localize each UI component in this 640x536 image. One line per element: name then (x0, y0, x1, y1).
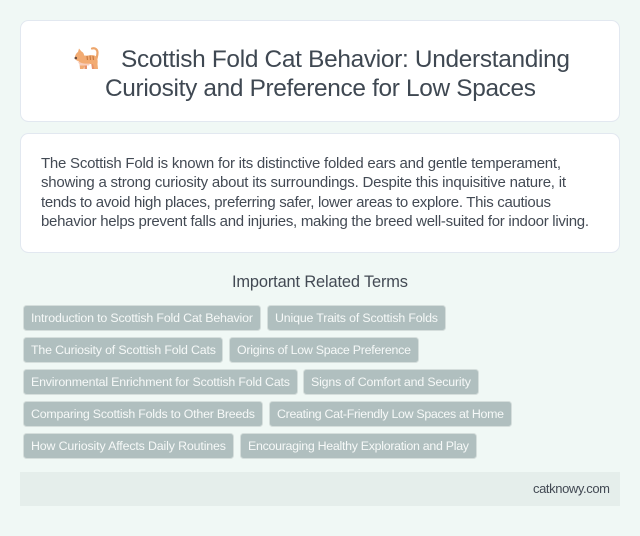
footer (20, 472, 620, 506)
footer source text: catknowy.com (533, 481, 610, 496)
tag (304, 370, 478, 394)
tag: How Curiosity Affects Daily Routines (31, 439, 226, 453)
tag list (24, 306, 512, 458)
title line 1: Scottish Fold Cat Behavior: Understanding (121, 46, 570, 73)
stripes (87, 56, 94, 60)
tag (268, 306, 446, 330)
description line 4: behavior helps prevent falls and injuries, making the breed well-suited for indoor living. (41, 213, 589, 230)
tag: Introduction to Scottish Fold Cat Behavior (31, 311, 253, 325)
panel: description card (20, 134, 620, 252)
head (75, 48, 84, 61)
panel: title card (20, 20, 620, 122)
tag (230, 338, 418, 362)
tag (24, 370, 298, 394)
tag: Comparing Scottish Folds to Other Breeds (31, 407, 255, 421)
tag: The Curiosity of Scottish Fold Cats (31, 343, 216, 357)
tag: Encouraging Healthy Exploration and Play (248, 439, 470, 453)
tag (24, 434, 234, 458)
tag (270, 402, 512, 426)
icon: cat (74, 48, 98, 69)
tag (24, 306, 260, 330)
tag: Environmental Enrichment for Scottish Fold Cats (31, 375, 290, 389)
description line 3: tends to avoid high places, preferring safer, lower areas to explore. This cautious (41, 194, 551, 211)
far legs (84, 62, 94, 69)
description line 1: The Scottish Fold is known for its distinctive folded ears and gentle temperament, (41, 155, 561, 172)
tag: Signs of Comfort and Security (311, 375, 472, 389)
tag (24, 338, 222, 362)
tag (240, 434, 476, 458)
belly (77, 60, 90, 66)
title line 2: Curiosity and Preference for Low Spaces (105, 75, 536, 102)
tag: Unique Traits of Scottish Folds (275, 311, 438, 325)
tag: Origins of Low Space Preference (237, 343, 411, 357)
description line 2: showing a strong curiosity about its surroundings. Despite this inquisitive nature, it (41, 174, 567, 191)
tag: Creating Cat-Friendly Low Spaces at Home (277, 407, 504, 421)
tag (24, 402, 262, 426)
muzzle (74, 57, 77, 59)
heading: related terms: Important Related Terms (232, 273, 408, 291)
body (79, 55, 98, 69)
tail (92, 48, 98, 58)
